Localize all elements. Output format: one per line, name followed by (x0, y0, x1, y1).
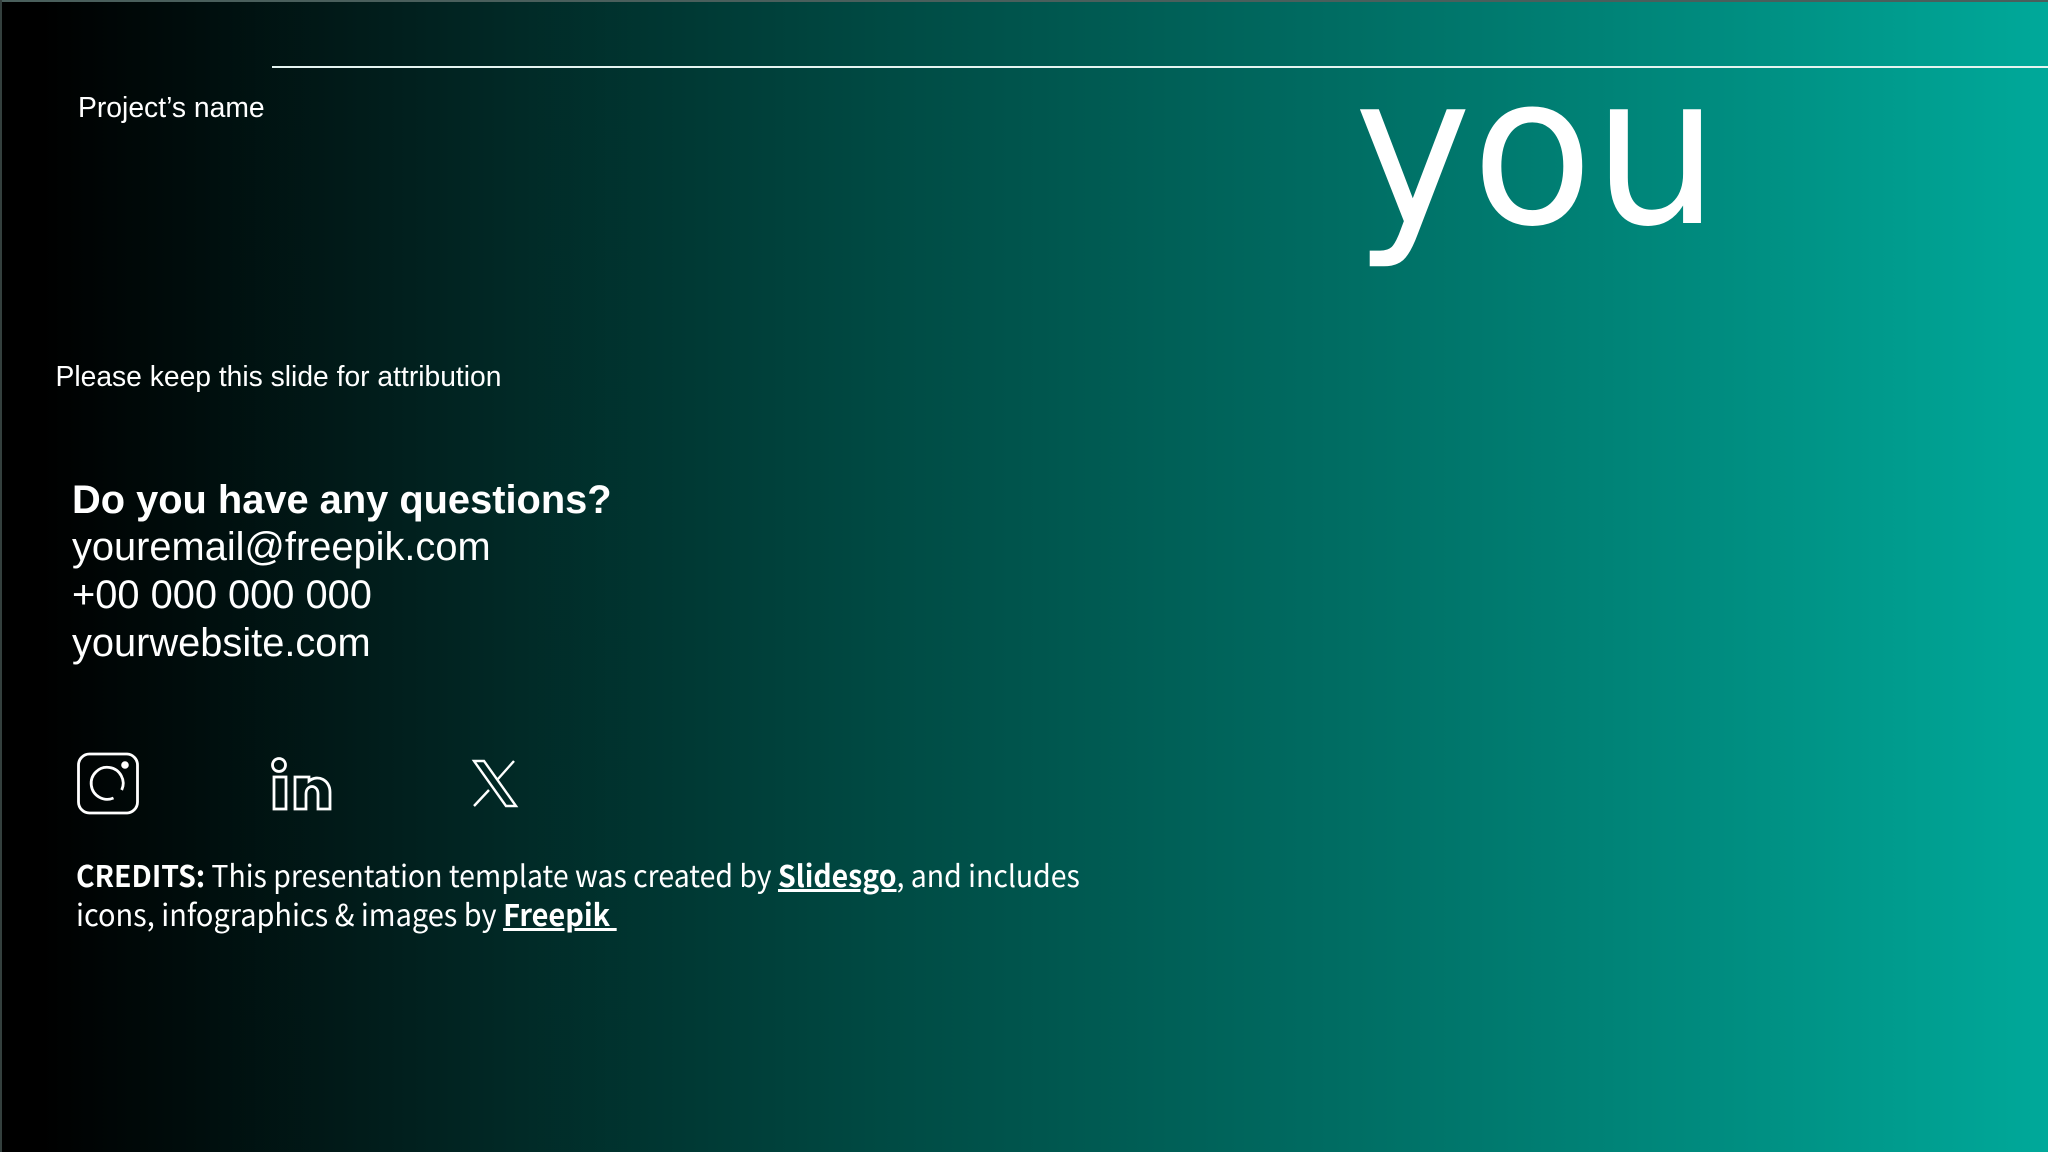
contact: email: youremail@freepik.com (72, 525, 491, 569)
contact: website: yourwebsite.com (72, 621, 371, 665)
contact: phone: +00 000 000 000 (72, 573, 372, 617)
credits (76, 852, 1080, 934)
label: project name: Project’s name (78, 91, 265, 123)
social icons (77, 752, 518, 814)
credits: CREDITS: This presentation template was created by Slidesgo, and includes (76, 852, 1080, 896)
icon: linkedin (272, 758, 330, 809)
text: attribution note: Please keep this slide for attribution (56, 360, 501, 392)
credits: icons, infographics & images by Freepik (76, 890, 610, 934)
title: you: you (1354, 30, 1719, 272)
contact block (72, 478, 612, 665)
icon: instagram (78, 754, 138, 813)
heading: questions: Do you have any questions? (72, 478, 612, 522)
icon: x (474, 761, 516, 806)
